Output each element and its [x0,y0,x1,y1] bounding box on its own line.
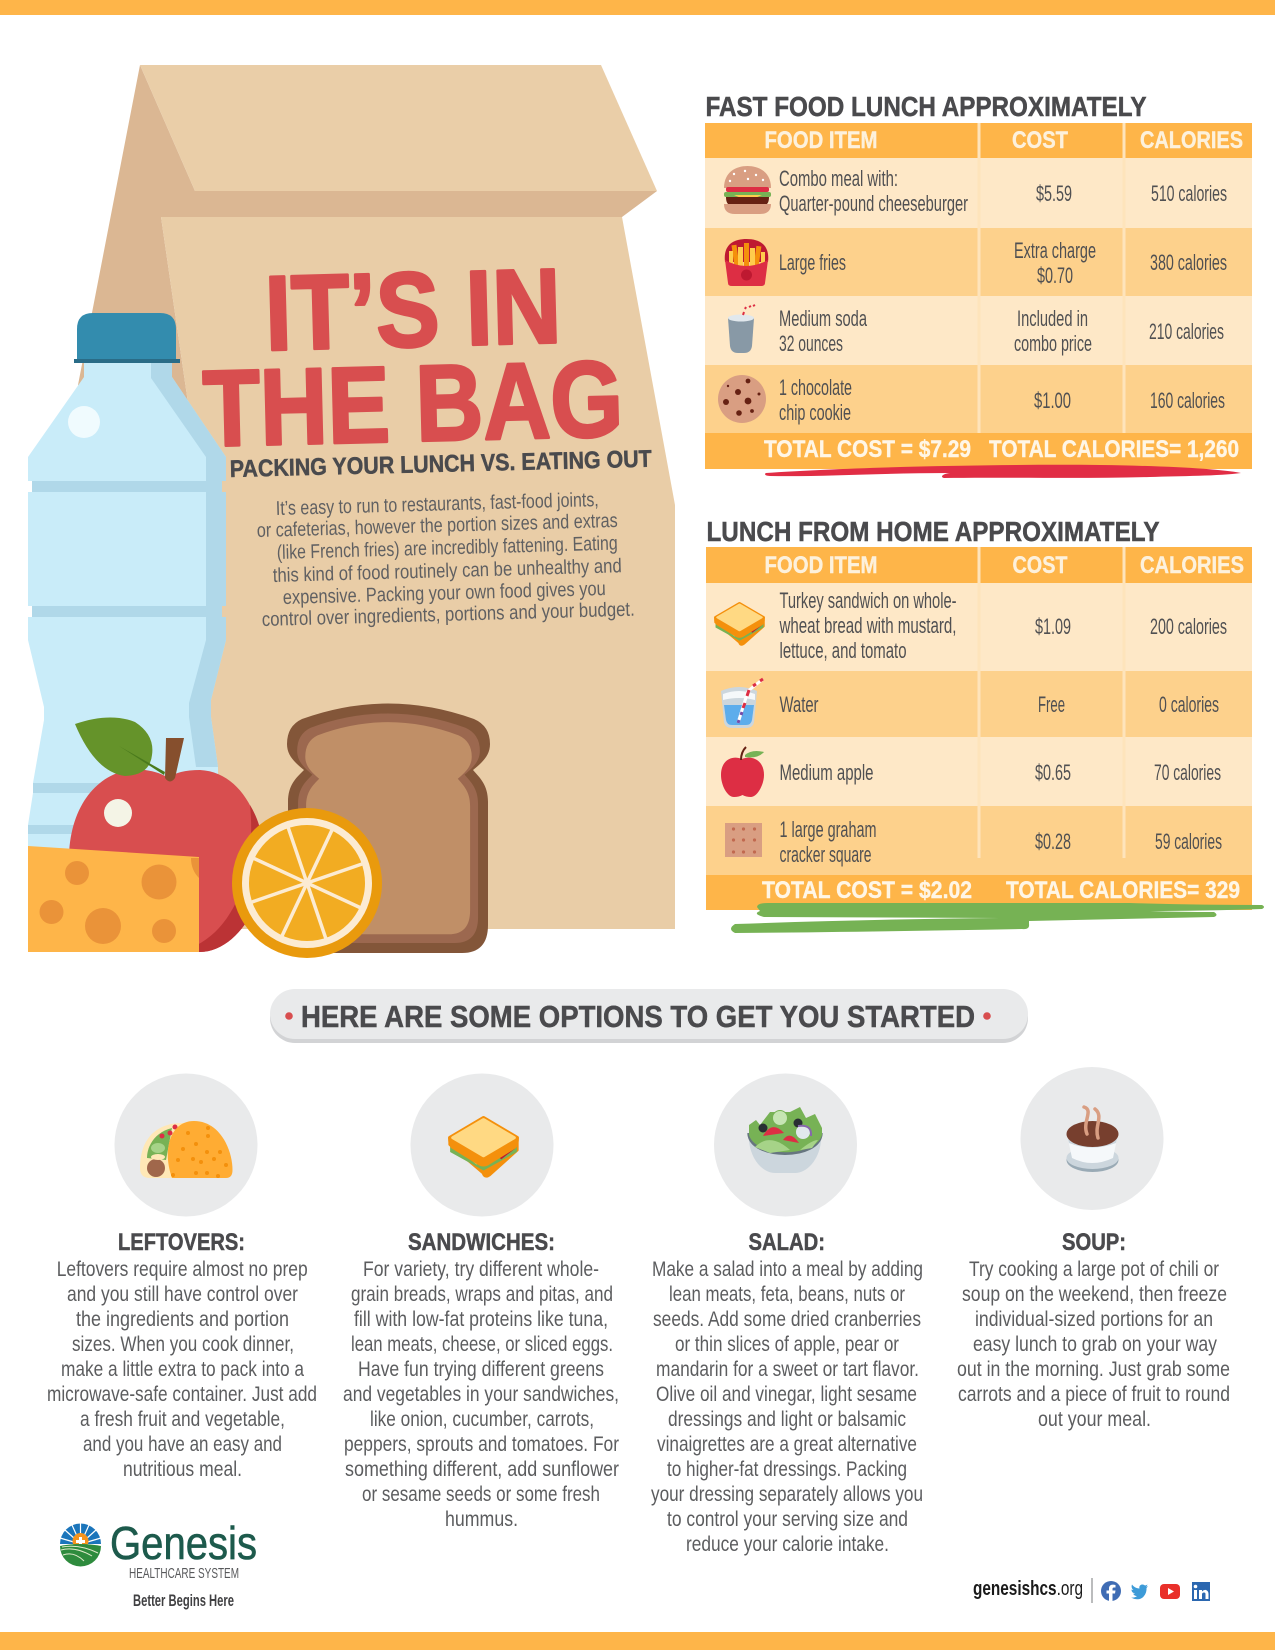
option: leftovers [47,1074,317,1481]
row: sandwich [779,588,1227,663]
row: burger [779,166,1227,216]
body text: sizes. When you cook dinner, [72,1333,294,1356]
top bar [0,0,1275,15]
row: soda: Included in [1017,306,1088,331]
body text: or sesame seeds or some fresh [362,1483,600,1506]
title [202,247,624,469]
body text: or thin slices of apple, pear or [675,1333,899,1356]
icon: salad bowl [749,1107,822,1173]
body text: Make a salad into a meal by adding [652,1258,923,1281]
row: soda: 32 ounces [779,331,843,356]
row: cookie: 1 chocolate [779,375,852,400]
row: cookie: 160 calories [1150,388,1225,413]
header row: CALORIES [1140,552,1244,579]
bottom bar [0,1632,1275,1650]
options banner [270,989,1028,1043]
body text: and you still have control over [67,1283,298,1306]
row: fries: Extra charge [1014,238,1096,263]
illustration: cheese wedge [28,846,199,952]
intro paragraph: this kind of food routinely can be unhealthy and [273,555,622,587]
row: graham cracker [780,817,1222,867]
sub-wordmark: HEALTHCARE SYSTEM [129,1565,239,1582]
row: graham cracker: 1 large graham [780,817,876,842]
body text: vinaigrettes are a great alternative [657,1433,917,1456]
total row: TOTAL CALORIES= 1,260 [989,436,1239,463]
options banner: HERE ARE SOME OPTIONS TO GET YOU STARTED [301,999,975,1034]
row: water: 0 calories [1159,692,1219,717]
body text: your dressing separately allows you [651,1483,923,1506]
title: IT’S IN [264,247,563,373]
body text: seeds. Add some dried cranberries [653,1308,921,1331]
row: burger: Combo meal with: [779,166,898,191]
icon: water glass [721,679,763,728]
body text: a fresh fruit and vegetable, [80,1408,285,1431]
row: fries: Large fries [779,250,846,275]
icon: linkedin [1192,1582,1210,1601]
icon: youtube [1160,1584,1180,1599]
body text: Have fun trying different greens [358,1358,604,1381]
illustration: water bottle [28,313,226,850]
row: graham cracker: cracker square [780,842,872,867]
row: burger: Quarter-pound cheeseburger [779,191,968,216]
body text [957,1258,1230,1431]
row: burger: $5.59 [1036,181,1072,206]
icon: twitter [1131,1584,1148,1599]
body text: peppers, sprouts and tomatoes. For [344,1433,619,1456]
row: fries: 380 calories [1150,250,1227,275]
row: cookie: $1.00 [1034,388,1071,413]
intro paragraph: (like French fries) are incredibly fattening. Eating [277,532,618,564]
logo mark [60,1523,101,1566]
total row: TOTAL CALORIES= 329 [1006,877,1240,904]
row: sandwich: wheat bread with mustard, [779,613,956,638]
row: water [780,692,1219,717]
table: fast food lunch [705,91,1252,478]
intro paragraph: or cafeterias, however the portion sizes and extras [257,510,618,542]
row: cookie [779,375,1225,425]
row: burger: 510 calories [1151,181,1227,206]
body text [47,1258,317,1481]
icon: small apple [721,747,764,797]
body text: microwave-safe container. Just add [47,1383,317,1406]
illustration: bread slice [287,704,490,953]
red scribble underline [765,465,1241,478]
body text: Try cooking a large pot of chili or [969,1258,1219,1281]
intro paragraph [257,489,635,631]
body text: soup on the weekend, then freeze [962,1283,1227,1306]
logo: Genesis Healthcare System [60,1517,257,1610]
row: graham cracker: $0.28 [1035,829,1071,854]
icon circle [114,1074,258,1216]
body text: fill with low-fat proteins like tuna, [354,1308,608,1331]
body text: lean meats, feta, beans, nuts or [669,1283,905,1306]
option: salad [651,1074,923,1556]
header row: FOOD ITEM [764,127,878,154]
intro paragraph: expensive. Packing your own food gives you [283,578,606,609]
website url: genesishcs.org [973,1578,1083,1600]
icon: facebook [1101,1581,1121,1601]
row: water: Water [780,692,818,717]
row: apple: 70 calories [1154,760,1221,785]
icon: sandwich [450,1118,517,1176]
header row [706,547,1252,583]
green scribble underline [731,903,1264,933]
heading: SALAD: [748,1229,825,1256]
header row: COST [1012,552,1068,579]
row: apple: $0.65 [1035,760,1071,785]
icon: graham cracker [725,823,762,857]
body text: make a little extra to pack into a [61,1358,304,1381]
body text: carrots and a piece of fruit to round [958,1383,1230,1406]
body text: Leftovers require almost no prep [57,1258,308,1281]
body text: the ingredients and portion [76,1308,289,1331]
intro paragraph: It’s easy to run to restaurants, fast-food joints, [276,489,599,520]
row: sandwich: Turkey sandwich on whole- [780,588,956,613]
body text: easy lunch to grab on your way [973,1333,1217,1356]
heading: FAST FOOD LUNCH APPROXIMATELY [706,91,1147,122]
subtitle: PACKING YOUR LUNCH VS. EATING OUT [229,446,652,483]
total row [705,433,1252,469]
icon circle [410,1074,554,1216]
body text: For variety, try different whole- [363,1258,599,1281]
row: soda: 210 calories [1149,319,1224,344]
icon: soup cup [1066,1107,1118,1172]
rows background [706,547,1252,875]
body text: dressings and light or balsamic [668,1408,906,1431]
table: lunch from home [706,516,1264,933]
header row: COST [1012,127,1068,154]
illustration: paper bag [78,65,675,929]
row: graham cracker: 59 calories [1155,829,1222,854]
total row [706,875,1252,910]
row: cookie: chip cookie [779,400,851,425]
body text: out your meal. [1038,1408,1151,1431]
body text: individual-sized portions for an [975,1308,1213,1331]
header row: FOOD ITEM [764,552,878,579]
header row: CALORIES [1140,127,1243,154]
body text: like onion, cucumber, carrots, [370,1408,594,1431]
total row: TOTAL COST = $7.29 [764,436,971,463]
social icons [1092,1578,1210,1603]
wordmark: Genesis [110,1517,257,1569]
body text: hummus. [445,1508,518,1531]
header row [705,123,1252,158]
row: soda: combo price [1014,331,1092,356]
body text: lean meats, cheese, or sliced eggs. [351,1333,613,1356]
total row: TOTAL COST = $2.02 [762,877,972,904]
body text: and vegetables in your sandwiches, [343,1383,619,1406]
row: sandwich: 200 calories [1150,614,1227,639]
heading: LEFTOVERS: [118,1229,245,1256]
illustration: orange slice [232,808,382,958]
icon: burger [724,166,771,214]
icon: sandwich [716,603,763,645]
icon: fries [725,239,768,286]
icon: taco [140,1121,232,1178]
body text: nutritious meal. [123,1458,242,1481]
body text [651,1258,923,1556]
body text: to higher-fat dressings. Packing [667,1458,907,1481]
option: soup [957,1067,1230,1431]
row: sandwich: lettuce, and tomato [780,638,906,663]
row: water: Free [1038,692,1065,717]
body text: reduce your calorie intake. [686,1533,889,1556]
rows background [705,123,1252,433]
body text: to control your serving size and [667,1508,908,1531]
row: fries: $0.70 [1037,263,1073,288]
title: THE BAG [202,338,624,469]
icon circle [714,1074,857,1216]
body text: something different, add sunflower [345,1458,619,1481]
intro paragraph: control over ingredients, portions and your budget. [262,599,635,631]
heading: LUNCH FROM HOME APPROXIMATELY [706,516,1160,547]
option: sandwiches [343,1074,619,1531]
row: soda [779,306,1224,356]
body text: out in the morning. Just grab some [957,1358,1230,1381]
icon: soda cup [728,305,755,353]
heading: SANDWICHES: [408,1229,555,1256]
row: apple [780,760,1221,785]
body text [343,1258,619,1531]
body text: Olive oil and vinegar, light sesame [656,1383,917,1406]
illustration: red apple [69,717,264,952]
row: sandwich: $1.09 [1035,614,1071,639]
body text: grain breads, wraps and pitas, and [351,1283,613,1306]
heading: SOUP: [1062,1229,1126,1256]
body text: mandarin for a sweet or tart flavor. [656,1358,919,1381]
row: fries [779,238,1227,288]
icon circle [1020,1067,1164,1210]
body text: and you have an easy and [83,1433,282,1456]
tagline: Better Begins Here [133,1591,234,1610]
row: soda: Medium soda [779,306,868,331]
icon: cookie [718,375,766,423]
row: apple: Medium apple [780,760,874,785]
